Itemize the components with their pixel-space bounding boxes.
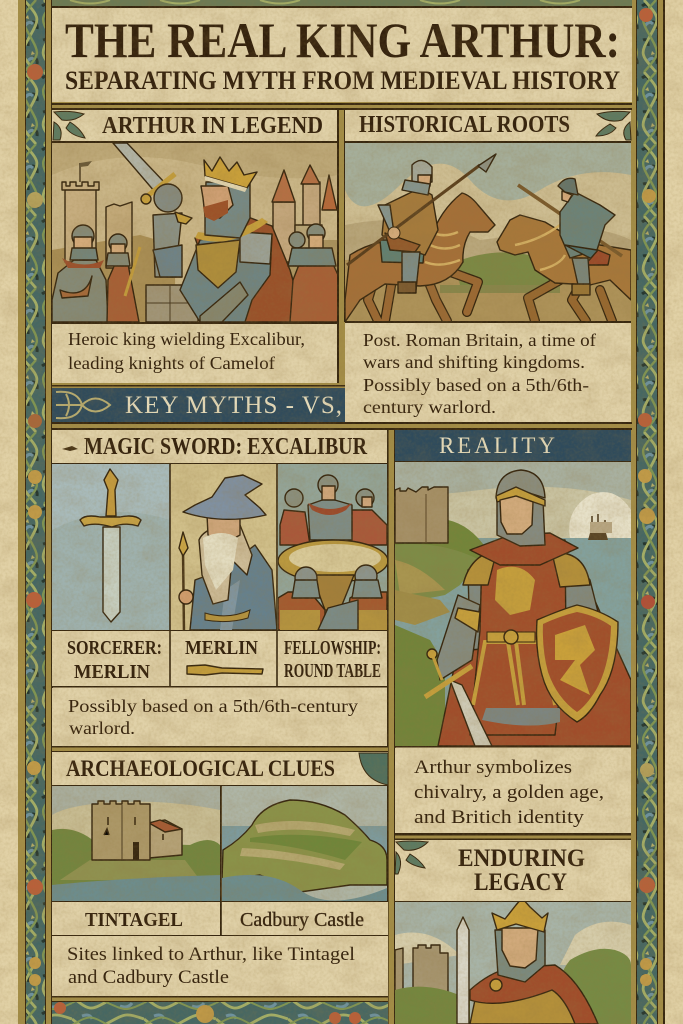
label: fellowship round table: FELLOWSHIP: [284, 637, 381, 659]
caption background [345, 323, 631, 422]
ship [588, 514, 612, 540]
panel: historical roots [345, 110, 631, 422]
sword [113, 143, 165, 192]
heading: MAGIC SWORD: EXCALIBUR [84, 434, 368, 460]
vertical divider between lower columns [387, 430, 396, 1024]
right decorative vine border [631, 0, 665, 1024]
caption background [52, 688, 388, 746]
left horse [345, 193, 495, 322]
banner: key myths vs [52, 388, 345, 423]
left rider [347, 154, 496, 293]
frame band between title and panels [52, 103, 632, 110]
illustration: tintagel [52, 786, 220, 901]
panel: historical roots: century warlord. [363, 397, 496, 417]
panel: key myths [52, 430, 388, 746]
caption: Possibly based on a 5th/6th-century [68, 696, 358, 716]
label: merlin: MERLIN [185, 637, 258, 659]
heading: ARTHUR IN LEGEND [102, 113, 323, 139]
top vine strip [52, 0, 632, 8]
illustration: sword [52, 464, 170, 630]
body [180, 232, 272, 322]
raised arm [153, 213, 182, 277]
head, coif and crown [205, 182, 250, 238]
corner leaf ornament [395, 841, 428, 874]
red cape [195, 217, 305, 322]
panel: reality: chivalry, a golden age, [414, 783, 604, 803]
panel: key myths: ROUND TABLE [284, 660, 381, 682]
heading background [52, 110, 338, 142]
illustration: round table [278, 464, 388, 630]
corner leaf ornament [53, 111, 85, 140]
label: sorcerer merlin: SORCERER: [67, 637, 162, 659]
panel: archaeological clues [52, 752, 388, 996]
panel: enduring legacy: LEGACY [474, 869, 567, 896]
cape [438, 590, 631, 746]
head [495, 930, 545, 982]
panel: historical roots: wars and shifting kingdoms. [363, 352, 585, 372]
caption background [52, 936, 388, 996]
panel: reality [395, 430, 631, 833]
scarf [470, 533, 578, 565]
illustration: historical knight [395, 462, 631, 746]
illustration: merlin [171, 464, 277, 633]
heading background [345, 110, 631, 142]
icon: gold staff [187, 665, 263, 675]
image labels background [52, 631, 388, 686]
heading background [395, 430, 631, 461]
heading: ENDURING [458, 845, 585, 872]
heading: HISTORICAL ROOTS [359, 112, 570, 138]
vertical divider between top panels [337, 110, 346, 387]
panel: arthur in legend: leading knights of Camelof [68, 353, 275, 373]
body and tabard [468, 545, 600, 650]
caption: Arthur symbolizes [414, 758, 572, 778]
right horse [497, 215, 631, 321]
label: tintagel: TINTAGEL [85, 909, 183, 931]
small arrow ornament [62, 446, 78, 451]
left decorative vine border [18, 0, 53, 1024]
title panel [52, 8, 632, 104]
bottom vine strip [52, 996, 388, 1024]
caption background [52, 324, 338, 385]
knights at right [290, 262, 338, 322]
banner leaf ornament [56, 392, 110, 418]
illustration: crowned arthur [395, 898, 631, 1024]
left arm [437, 595, 480, 680]
frame band above enduring legacy [395, 833, 631, 840]
illustration: riding warriors [345, 143, 631, 322]
banner heading: KEY MYTHS - VS, [125, 392, 342, 419]
subtitle: SEPARATING MYTH FROM MEDIEVAL HISTORY [65, 66, 620, 95]
labels background [52, 902, 388, 935]
illustration: king wielding Excalibur [52, 143, 338, 322]
caption: Sites linked to Arthur, like Tintagel [67, 945, 355, 965]
crown [492, 898, 548, 932]
heading background [52, 752, 388, 785]
heading: REALITY [439, 433, 555, 458]
shoulders [462, 556, 494, 586]
horizontal double rule below top-left panel [52, 383, 345, 388]
right rider [518, 178, 622, 295]
shield [537, 605, 618, 722]
frame band above archaeological clues [52, 746, 388, 752]
head [497, 500, 545, 546]
caption: Post. Roman Britain, a time of [363, 330, 596, 350]
heading: ARCHAEOLOGICAL CLUES [66, 756, 335, 781]
panel: enduring legacy [395, 840, 631, 1024]
illustration: cadbury castle [222, 786, 387, 901]
panel: arthur in legend [52, 110, 338, 385]
corner ornament [359, 753, 388, 785]
cape and scarf [470, 965, 598, 1024]
panel: key myths: warlord. [69, 718, 135, 738]
panel: key myths: MERLIN [74, 661, 151, 683]
heading background [395, 840, 631, 901]
knights at left [52, 225, 140, 322]
stone block [146, 285, 198, 322]
sword [457, 917, 469, 1024]
caption background [395, 748, 631, 833]
corner leaf ornament [596, 111, 631, 140]
frame band below banner [52, 422, 632, 430]
label: cadbury castle: Cadbury Castle [240, 909, 364, 931]
heading background [52, 430, 388, 463]
caption: Heroic king wielding Excalibur, [68, 329, 305, 349]
panel: reality: and Britich identity [414, 808, 585, 828]
gold tunic [470, 990, 574, 1024]
panel: historical roots: Possibly based on a 5th/6th- [363, 375, 589, 395]
sword [450, 680, 492, 746]
panel: archaeological clues: and Cadbury Castle [68, 968, 229, 988]
